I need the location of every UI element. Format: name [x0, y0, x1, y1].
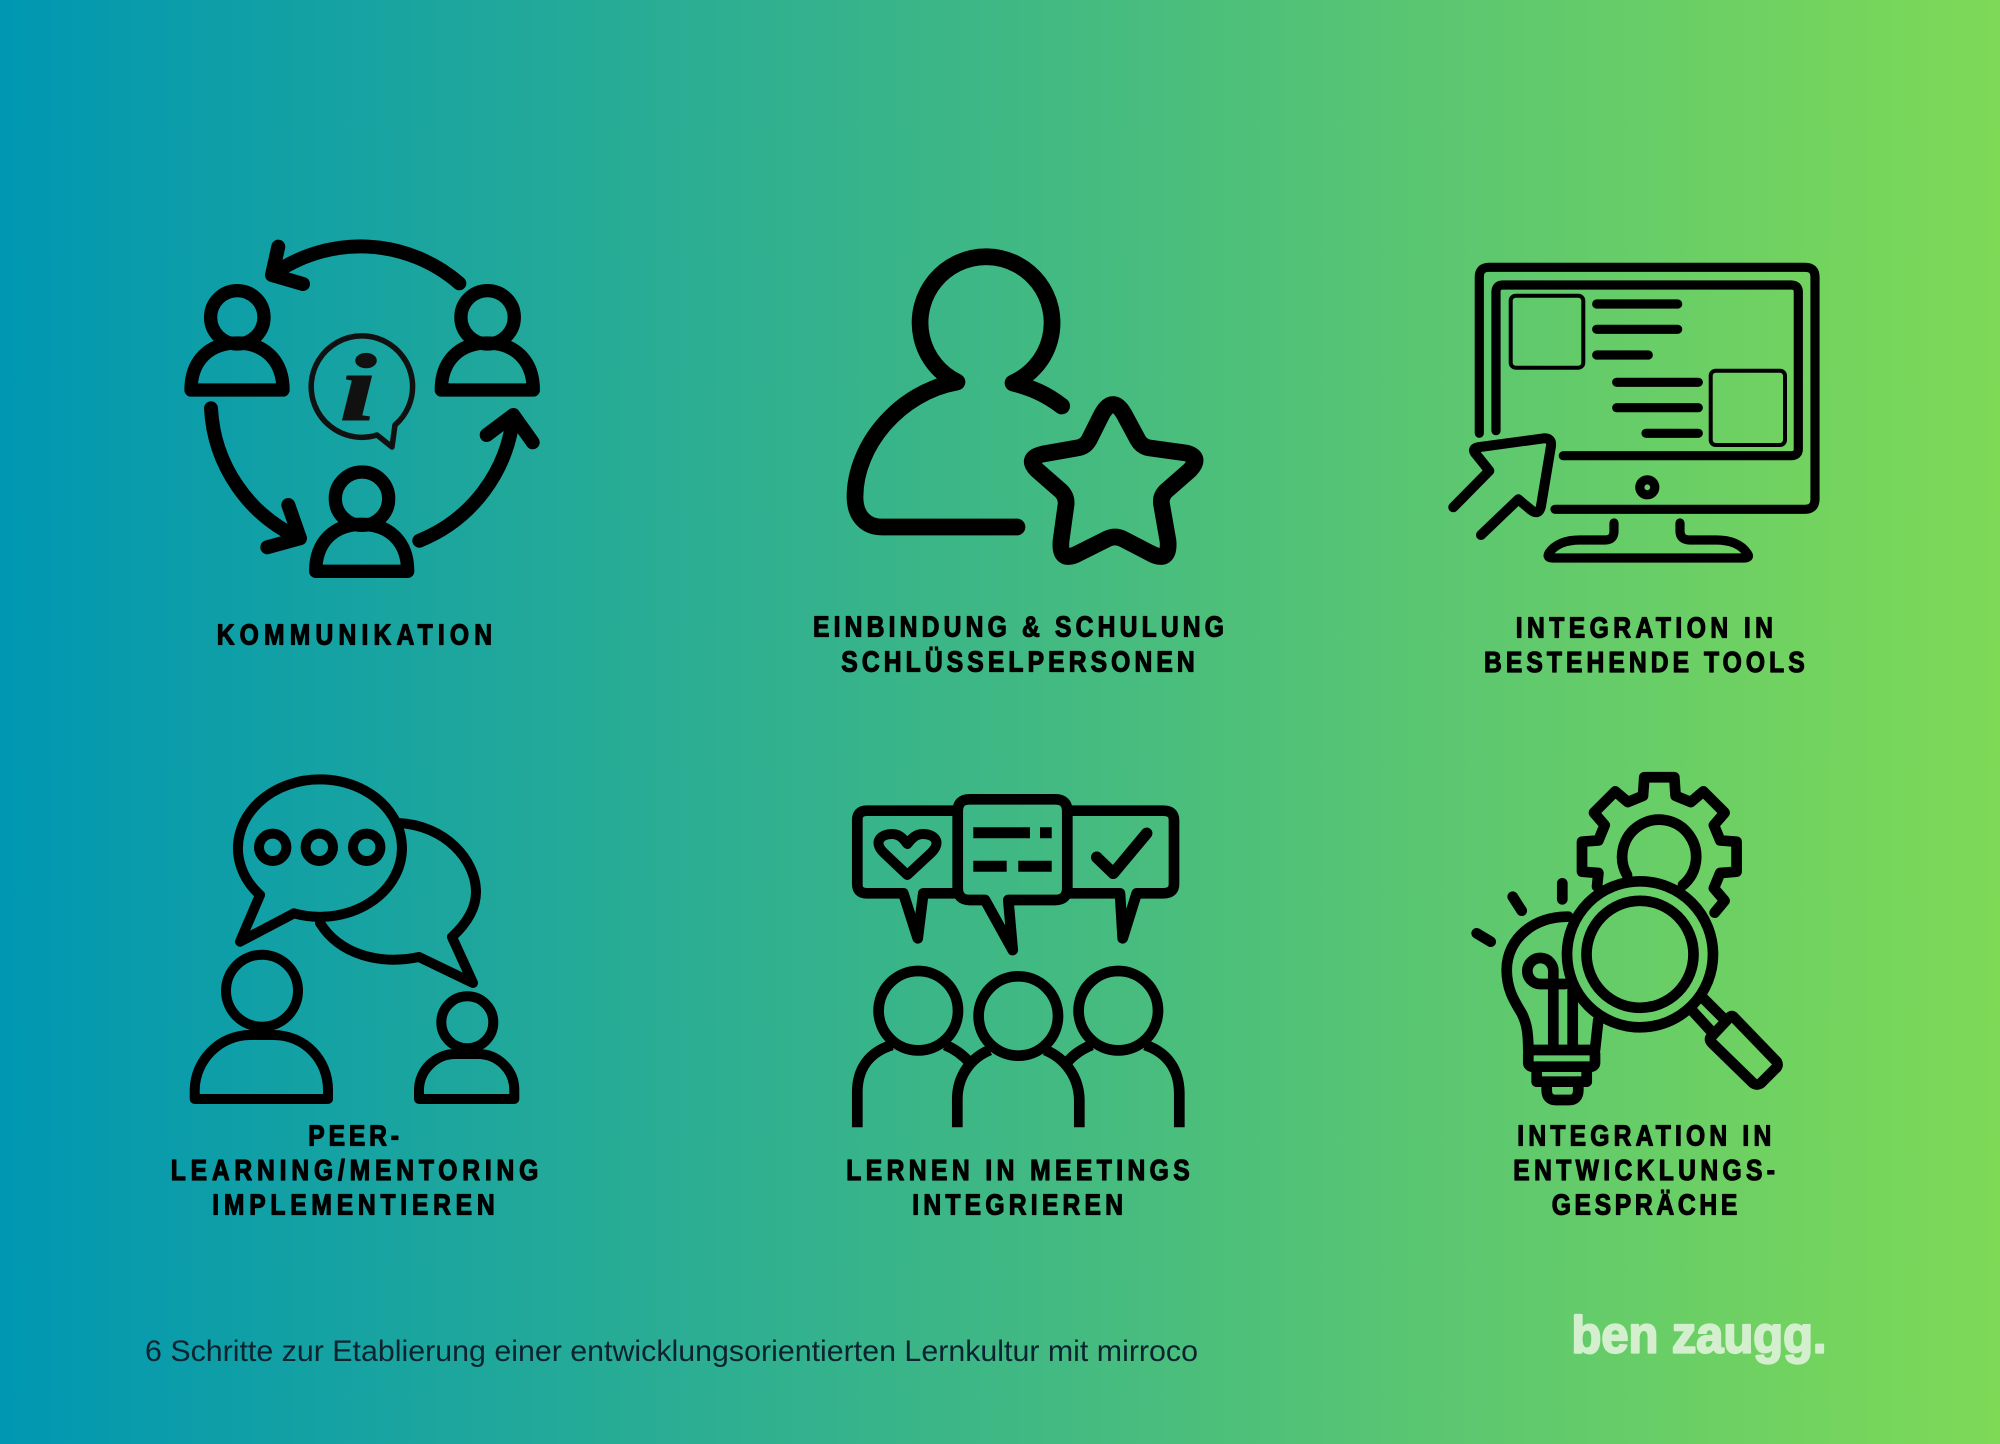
label: Lernen in Meetings integrieren: INTEGRIEREN — [912, 1188, 1123, 1221]
panel: Peer-Learning und Mentoring — [171, 779, 538, 1221]
panel: Integration in Entwicklungsgespräche — [1477, 777, 1778, 1221]
label: Integration in Entwicklungsgespräche: ENTWICKLUNGS- — [1513, 1154, 1775, 1186]
icon: person with star — [855, 257, 1195, 557]
label: Integration in bestehende Tools: INTEGRATION IN — [1516, 612, 1773, 644]
label: Peer-Learning/Mentoring implementieren: LEARNING/MENTORING — [171, 1154, 538, 1186]
label: Integration in bestehende Tools: BESTEHENDE TOOLS — [1484, 646, 1805, 678]
label: Einbindung und Schulung Schlüsselpersonen: SCHLÜSSELPERSONEN — [841, 646, 1195, 678]
panel: Lernen in Meetings — [846, 799, 1190, 1221]
icon: desktop monitor with cursor — [1453, 267, 1815, 558]
label: Einbindung und Schulung Schlüsselpersonen — [813, 611, 1224, 678]
label: Peer-Learning/Mentoring implementieren — [171, 1119, 538, 1221]
icon: three people with feedback bubbles — [857, 799, 1179, 1127]
label: Integration in Entwicklungsgespräche: GESPRÄCHE — [1552, 1188, 1737, 1221]
label: Lernen in Meetings integrieren: LERNEN IN MEETINGS — [846, 1154, 1190, 1186]
label: Integration in bestehende Tools — [1484, 612, 1805, 678]
label: Kommunikation: KOMMUNIKATION — [217, 619, 492, 651]
icon: gear, light bulb and magnifier — [1477, 777, 1778, 1100]
icon: two people with speech bubbles — [195, 779, 514, 1099]
panel: Einbindung und Schulung — [813, 257, 1224, 678]
label: Integration in Entwicklungsgespräche: INTEGRATION IN — [1517, 1119, 1771, 1152]
label: Peer-Learning/Mentoring implementieren: PEER- — [308, 1119, 399, 1152]
logo: ben zaugg: ben zaugg. — [1572, 1307, 1826, 1365]
panel: Integration in bestehende Tools — [1453, 267, 1815, 678]
panel: Kommunikation — [191, 246, 533, 651]
footer caption: 6 Schritte zur Etablierung einer entwicklungsorientierten Lernkultur mit mirroco — [145, 1335, 1198, 1368]
label: Lernen in Meetings integrieren — [846, 1154, 1190, 1221]
label: Integration in Entwicklungsgespräche — [1513, 1119, 1775, 1221]
icon: three people in an information cycle: i — [339, 335, 377, 441]
label: Einbindung und Schulung Schlüsselpersonen: EINBINDUNG & SCHULUNG — [813, 611, 1224, 643]
label: Peer-Learning/Mentoring implementieren: IMPLEMENTIEREN — [212, 1188, 495, 1221]
icon: three people in an information cycle — [191, 246, 533, 571]
